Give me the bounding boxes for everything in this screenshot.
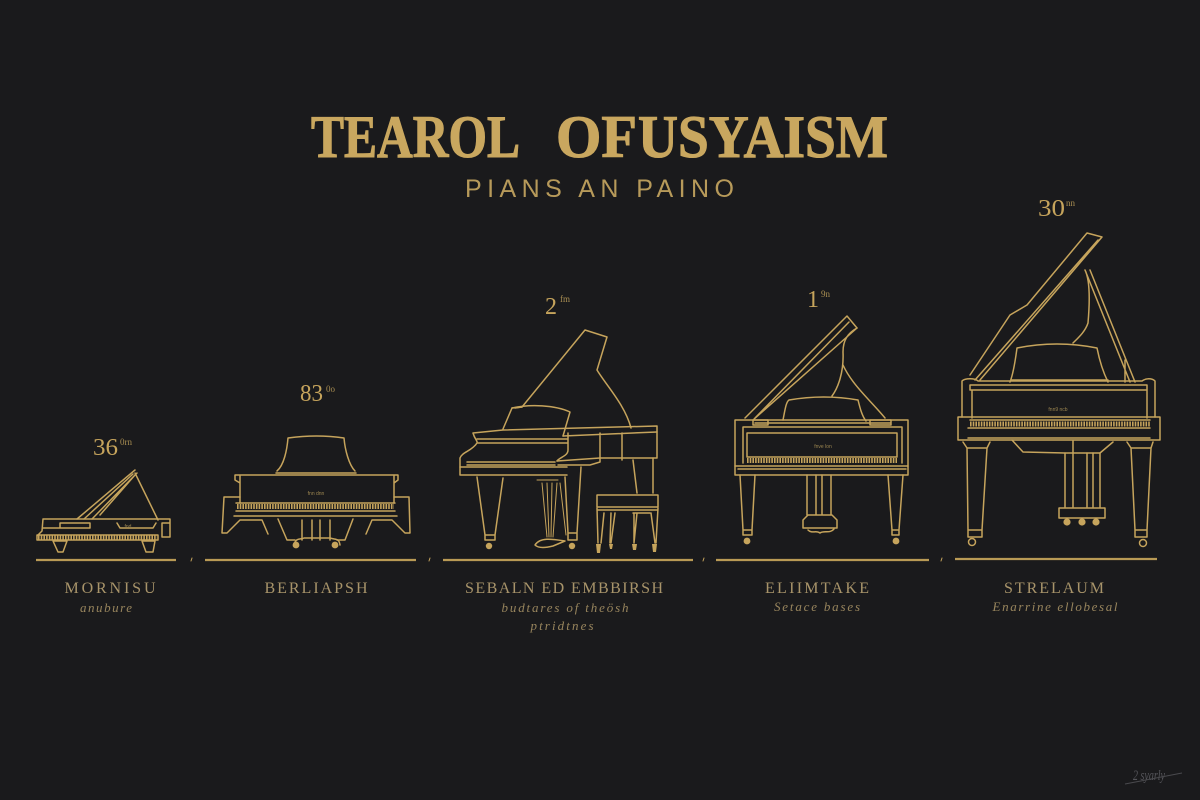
size label 1 — [93, 435, 132, 461]
tick 3 — [703, 558, 704, 561]
name 2: BERLIAPSH — [264, 580, 368, 597]
title: OF — [556, 104, 637, 170]
size label 3 — [545, 294, 570, 320]
piano 2: front view with closed lid — [222, 381, 410, 548]
size label 3: fm — [560, 294, 570, 304]
size label 4 — [807, 287, 830, 313]
size label 2: 83 — [300, 381, 323, 407]
piano 3 drawing — [460, 330, 658, 553]
tick 1 — [191, 558, 192, 561]
description 3 — [502, 600, 628, 633]
description 1: anubure — [80, 600, 132, 615]
piano 1 drawing: fnd — [125, 524, 132, 530]
tick 4 — [941, 558, 942, 561]
name 5: STRELAUM — [1004, 580, 1104, 597]
baseline 5 — [955, 558, 1157, 560]
signature: 2 syarly — [1133, 768, 1165, 784]
baseline 2 — [205, 559, 416, 561]
size label 1: 0rn — [120, 437, 132, 447]
name 4: ELIIMTAKE — [765, 580, 869, 597]
size label 5: nn — [1066, 198, 1076, 208]
name 1: MORNISU — [64, 580, 156, 597]
size label 2: 0o — [326, 384, 336, 394]
subtitle: PIANS AN PAINO — [465, 175, 734, 203]
size label 5: 30 — [1038, 196, 1065, 222]
size label 4: 9n — [821, 289, 830, 299]
size label 5 — [1038, 196, 1076, 222]
baseline 3 — [443, 559, 693, 561]
piano 2 drawing: fnn dnn — [308, 491, 325, 497]
piano 5 drawing: fnn9 ncb — [1048, 407, 1068, 413]
description 5: Enarrine ellobesal — [992, 599, 1118, 614]
baseline 4 — [716, 559, 929, 561]
piano 2 drawing — [222, 436, 410, 548]
name 3: SEBALN ED EMBBIRSH — [465, 580, 663, 597]
piano 3: side view with bench — [460, 294, 658, 553]
size label 2 — [300, 381, 336, 407]
size label 4: 1 — [807, 287, 819, 313]
title: TEAROL — [311, 104, 520, 170]
piano 5 drawing — [958, 233, 1160, 546]
piano 4 drawing — [735, 316, 908, 544]
piano 1: smallest baby grand — [37, 435, 170, 552]
description 4: Setace bases — [774, 599, 860, 614]
size label 3: 2 — [545, 294, 557, 320]
description 3: ptridtnes — [530, 618, 594, 633]
piano 4 drawing: fnve lon — [814, 444, 832, 450]
baseline 1 — [36, 559, 176, 561]
description 3: budtares of theösh — [502, 600, 628, 615]
title — [311, 104, 888, 170]
title: USYAISM — [638, 104, 888, 170]
size label 1: 36 — [93, 435, 118, 461]
piano 5: tallest concert grand — [958, 196, 1160, 546]
tick 2 — [429, 558, 430, 561]
piano 4: front view with raised lid — [735, 287, 908, 544]
